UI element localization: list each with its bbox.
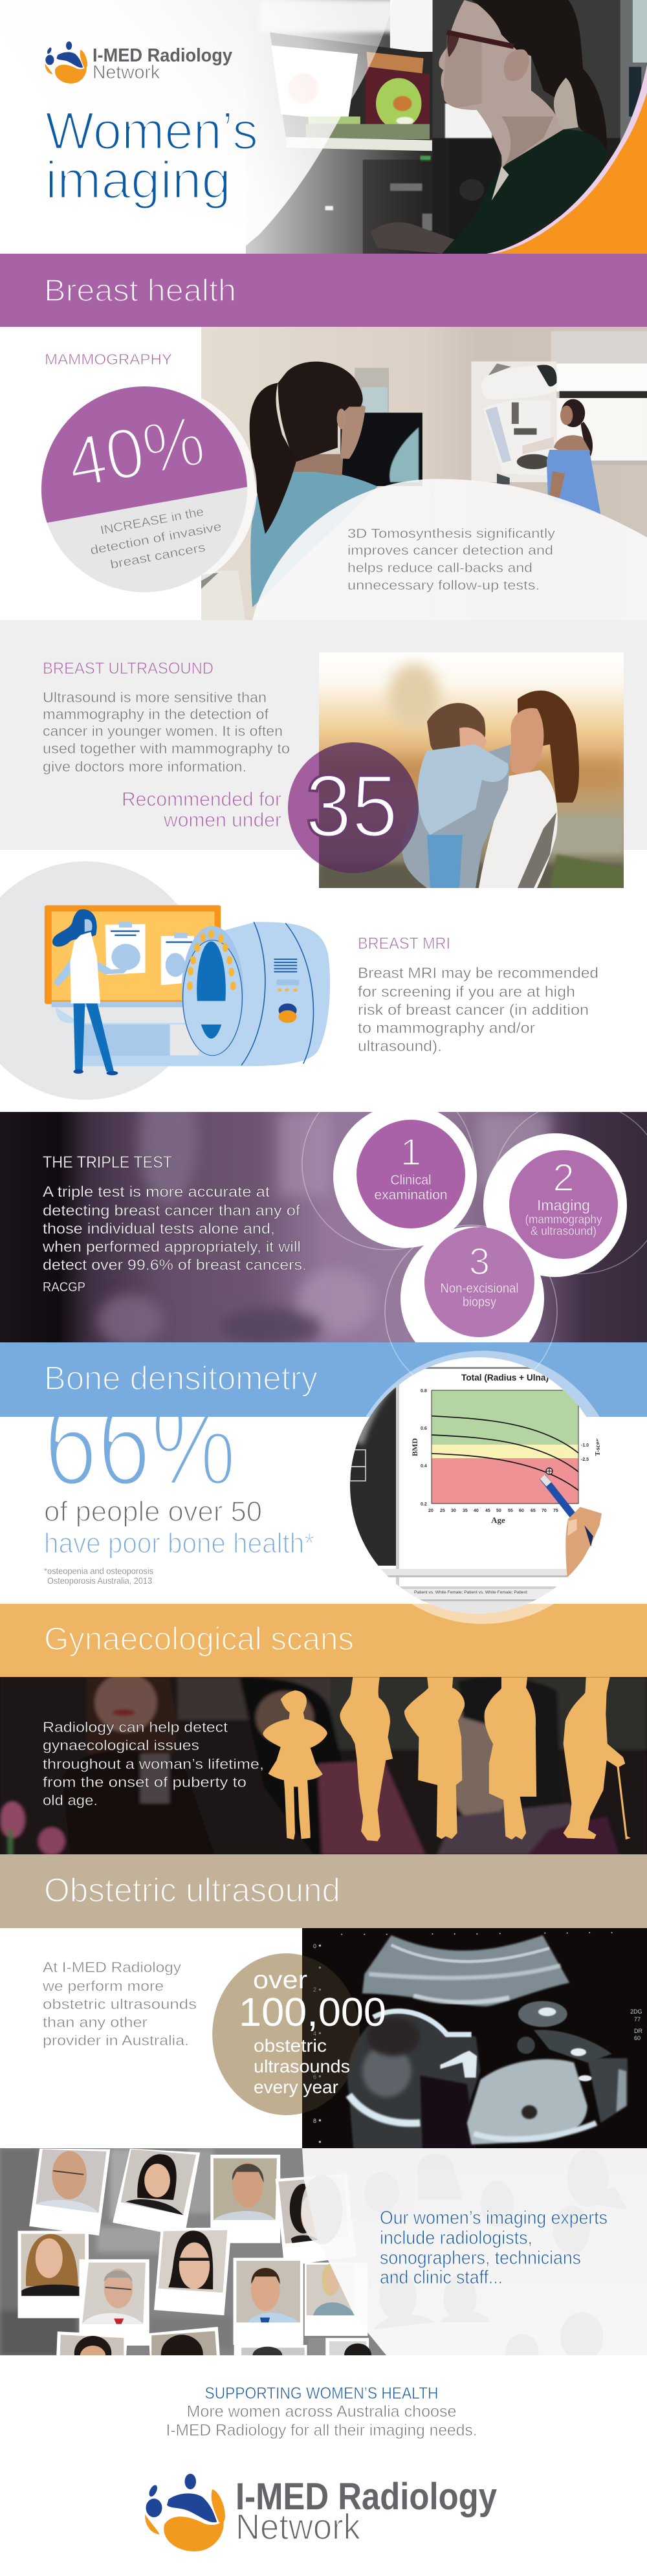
ultrasound image <box>302 1928 647 2149</box>
heading: Bone densitometry <box>44 1360 318 1397</box>
heading: Gynaecological scans <box>44 1621 354 1657</box>
body text <box>43 689 290 775</box>
circle 2: imaging: (mammography <box>525 1213 602 1226</box>
team text <box>380 2208 608 2288</box>
logo: I-MED Radiology Network: Network <box>93 62 160 83</box>
illustration: MRI scanner and doctor <box>0 861 330 1100</box>
panel: the triple test <box>0 1074 647 1370</box>
polaroid: woman with glasses <box>276 2174 356 2267</box>
footnote: Osteoporosis Australia, 2013 <box>47 1575 152 1586</box>
circle 2: imaging <box>483 1133 627 1277</box>
logo: I-MED Radiology Network <box>45 41 232 83</box>
oval left part beside ultrasound <box>212 1953 302 2115</box>
title <box>47 113 256 208</box>
ultrasound scale labels: 0 <box>313 1943 316 1949</box>
body text: used together with mammography to <box>43 740 290 757</box>
gynaecological body text: gynaecological issues <box>43 1737 199 1753</box>
chart: BMD by age: 0.2 <box>421 1502 427 1507</box>
circle 1: clinical examination: examination <box>374 1188 448 1203</box>
body text: ultrasound). <box>358 1038 442 1054</box>
stat circle: 40%: 40% <box>61 400 211 504</box>
body text: those individual tests alone and, <box>43 1220 275 1237</box>
amniotic band <box>362 1935 569 2006</box>
stat circle: 40%: breast cancers <box>109 541 206 572</box>
icon: logo mark <box>145 2474 225 2551</box>
translucent white curved overlay <box>0 0 393 254</box>
recommendation text <box>122 788 281 831</box>
team text: include radiologists, <box>380 2228 532 2248</box>
fetal head <box>347 2011 480 2149</box>
polaroid row: bottom faces <box>56 2327 371 2373</box>
ultrasound scale labels <box>313 1943 642 2124</box>
polaroid: man with glasses <box>29 2149 110 2236</box>
chart: BMD by age <box>410 1372 602 1525</box>
circle 2: imaging: Imaging <box>537 1197 590 1214</box>
footer logo <box>145 2474 497 2551</box>
heading: BREAST MRI <box>358 935 450 953</box>
bone health text: of people over 50 <box>44 1496 262 1527</box>
chart: BMD by age: 75 <box>553 1509 558 1513</box>
bone health text <box>44 1496 314 1586</box>
body text: mammography in the detection of <box>43 706 269 722</box>
hero background: doctor at monitors <box>208 0 647 254</box>
chart: BMD by age: -1.0 <box>581 1443 589 1448</box>
obstetric body text: provider in Australia. <box>43 2032 189 2049</box>
gynaecological body text: Radiology can help detect <box>43 1719 228 1735</box>
gynaecological body text: from the onset of puberty to <box>43 1774 247 1790</box>
bone density scan circle <box>350 1357 602 1614</box>
ultrasound scale labels: 77 <box>634 2016 641 2023</box>
white overlay with faint portraits <box>302 2148 647 2368</box>
obstetric body text: At I-MED Radiology <box>43 1959 181 1975</box>
obstetric stat text <box>239 1966 386 2097</box>
stat circle: 40%: detection of invasive <box>89 520 223 558</box>
footer text: SUPPORTING WOMEN’S HEALTH <box>204 2384 439 2403</box>
panel: Gynaecological scans band <box>0 1604 647 1677</box>
heading: MAMMOGRAPHY <box>45 351 172 368</box>
chart: BMD by age: 0.8 <box>421 1389 427 1393</box>
body text: Breast MRI may be recommended <box>358 964 598 981</box>
x-ray texture <box>92 1112 556 1342</box>
fetal limb <box>518 2001 567 2027</box>
logo wordmark: I-MED Radiology <box>236 2476 497 2518</box>
circle 1: clinical examination: 1 <box>400 1131 421 1173</box>
chart: BMD by age: T-scor <box>595 1438 602 1456</box>
chart: BMD by age: 30 <box>451 1509 456 1513</box>
footer paragraph <box>166 2403 477 2439</box>
panel: mammography <box>39 327 647 620</box>
scale dots <box>319 1932 613 2143</box>
ultrasound scale labels: 2DG <box>630 2008 642 2015</box>
ultrasound scale labels: DR <box>634 2028 642 2034</box>
circle 3: non-excisional biopsy: 3 <box>469 1241 490 1283</box>
circle 2: imaging: 2 <box>553 1156 575 1199</box>
circle 1: clinical examination <box>333 1104 477 1248</box>
chart: BMD by age: 40 <box>474 1509 479 1513</box>
chart: BMD by age: 0.4 <box>421 1464 427 1469</box>
concrete texture <box>0 2148 233 2356</box>
polaroid: woman with curly hair <box>18 2231 89 2318</box>
stat circle: 40% <box>39 382 257 595</box>
footer paragraph: I-MED Radiology for all their imaging needs. <box>166 2421 477 2439</box>
chart: BMD by age: 50 <box>496 1509 501 1513</box>
chart: BMD by age: BMD <box>410 1438 419 1456</box>
body text: 3D Tomosynthesis significantly <box>347 527 555 541</box>
team text: sonographers, technicians <box>380 2248 581 2269</box>
fetal body <box>467 2059 587 2144</box>
chart: BMD by age: 55 <box>508 1509 513 1513</box>
thin ring outlines <box>302 1112 647 1274</box>
body text: improves cancer detection and <box>347 544 553 558</box>
panel: breast ultrasound <box>0 620 647 850</box>
footer paragraph: More women across Australia choose <box>186 2403 457 2421</box>
heading: Obstetric ultrasound <box>44 1872 340 1909</box>
polaroid: smiling man <box>210 2155 280 2243</box>
panel: Bone densitometry band <box>0 1342 647 1417</box>
footnote <box>44 1566 153 1586</box>
body text: helps reduce call-backs and <box>347 561 532 575</box>
stat circle: under 35: 35 <box>305 757 398 855</box>
title: Women’s <box>45 102 258 161</box>
panel: Obstetric ultrasound band <box>0 1854 647 1928</box>
chart: BMD by age: -2.5 <box>581 1458 589 1462</box>
obstetric body text: than any other <box>43 2014 148 2030</box>
circle 2: imaging: & ultrasound) <box>531 1225 597 1238</box>
obstetric stat text: every year <box>254 2077 338 2097</box>
body text: to mammography and/or <box>358 1019 535 1036</box>
ultrasound scale labels: 60 <box>634 2035 641 2041</box>
panel: breast MRI <box>0 861 598 1100</box>
chart: BMD by age: 45 <box>485 1509 490 1513</box>
circle 1: clinical examination: Clinical <box>391 1173 431 1188</box>
chart: BMD by age: 20 <box>428 1509 433 1513</box>
body text: detecting breast cancer than any of <box>43 1202 301 1219</box>
body text <box>42 1183 307 1273</box>
heading: BREAST ULTRASOUND <box>43 660 214 678</box>
ultrasound scale labels: 2 <box>313 1986 316 1993</box>
chart title: Total (Radius + Ulna) <box>461 1372 549 1382</box>
polaroid: older man with red tie <box>79 2260 149 2346</box>
small caption in the scan: Patient vs. White Female; Patient vs. White Female; Patient <box>414 1591 527 1595</box>
oval right part over ultrasound <box>302 1955 360 2113</box>
logo wordmark: I-MED Radiology <box>93 45 232 66</box>
footnote: *osteopenia and osteoporosis <box>44 1566 153 1576</box>
body text: Ultrasound is more sensitive than <box>43 689 267 705</box>
body text: unnecessary follow-up tests. <box>347 579 540 593</box>
icon: logo mark <box>45 41 87 83</box>
circle 3: non-excisional biopsy: biopsy <box>463 1295 496 1309</box>
gynaecological body text <box>43 1719 264 1808</box>
polaroid: woman in black jacket <box>113 2149 200 2237</box>
obstetric stat text: 100,000 <box>239 1990 386 2035</box>
dimmed photo of women <box>0 1673 647 1856</box>
gynaecological body text: old age. <box>43 1792 98 1808</box>
ultrasound scale labels: 8 <box>313 2118 316 2124</box>
stat circle: under 35 <box>288 742 419 873</box>
footer logo: Network <box>236 2506 361 2547</box>
team text: and clinic staff... <box>380 2267 503 2288</box>
photo: mother and daughter <box>319 652 624 888</box>
obstetric body text <box>42 1959 197 2049</box>
bone health text: have poor bone health* <box>44 1527 314 1559</box>
recommendation text: women under <box>163 808 281 831</box>
mammography photo <box>201 327 647 620</box>
chart: BMD by age: 25 <box>440 1509 445 1513</box>
obstetric stat text: ultrasounds <box>254 2056 350 2076</box>
body text: give doctors more information. <box>43 759 247 775</box>
ultrasound scale labels: 4 <box>313 2030 316 2037</box>
obstetric stat text: over <box>253 1966 307 1994</box>
ultrasound scale labels: 6 <box>313 2074 316 2080</box>
body text: risk of breast cancer (in addition <box>358 1001 589 1018</box>
silhouettes: women at five life stages <box>263 1677 631 1841</box>
polaroid: blonde woman <box>305 2263 367 2336</box>
decorative translucent rings around bone image <box>346 1225 619 1624</box>
source: RACGP <box>43 1280 85 1294</box>
heading: Breast health <box>44 274 236 308</box>
icon: hand holding pen <box>542 1477 602 1577</box>
title: imaging <box>45 151 231 210</box>
polaroid: woman with dark hair and glasses <box>154 2228 232 2315</box>
team text: Our women’s imaging experts <box>380 2208 608 2228</box>
panel: Breast health band <box>0 254 647 327</box>
recommendation text: Recommended for <box>122 788 281 810</box>
body text: cancer in younger women. It is often <box>43 723 283 739</box>
stat: 66%: 66% <box>44 1374 236 1511</box>
body text <box>358 964 598 1054</box>
body text: when performed appropriately, it will <box>42 1238 301 1255</box>
chart: BMD by age: Age <box>491 1515 505 1525</box>
chart: BMD by age: 65 <box>531 1509 536 1513</box>
panel: gynaecological photo and silhouettes <box>0 1673 647 1856</box>
obstetric stat text: obstetric <box>254 2036 327 2056</box>
chart: BMD by age: 35 <box>463 1509 468 1513</box>
circle 3: non-excisional biopsy: Non-excisional <box>440 1282 519 1296</box>
polaroid: man in blue shirt <box>234 2258 303 2345</box>
orange corner curve <box>487 65 647 254</box>
panel: staff polaroids <box>0 2148 647 2373</box>
obstetric body text: we perform more <box>42 1978 164 1994</box>
chart: BMD by age: 60 <box>519 1509 524 1513</box>
body text <box>347 527 555 593</box>
chart: BMD by age: 70 <box>542 1509 547 1513</box>
heading: THE TRIPLE TEST <box>43 1153 172 1171</box>
body text: A triple test is more accurate at <box>43 1183 270 1200</box>
body text: detect over 99.6% of breast cancers. <box>43 1256 307 1273</box>
circle 3: non-excisional biopsy <box>400 1227 544 1342</box>
stat circle: 40%: INCREASE in the <box>99 505 205 538</box>
chart: BMD by age: 0.6 <box>421 1427 427 1431</box>
gynaecological body text: throughout a woman’s lifetime, <box>43 1756 264 1772</box>
footer text <box>166 2384 477 2439</box>
translucent white curve with text <box>252 479 647 620</box>
panel: hero photo and title <box>0 0 647 254</box>
obstetric body text: obstetric ultrasounds <box>43 1996 197 2012</box>
body text: for screening if you are at high <box>358 983 575 1000</box>
